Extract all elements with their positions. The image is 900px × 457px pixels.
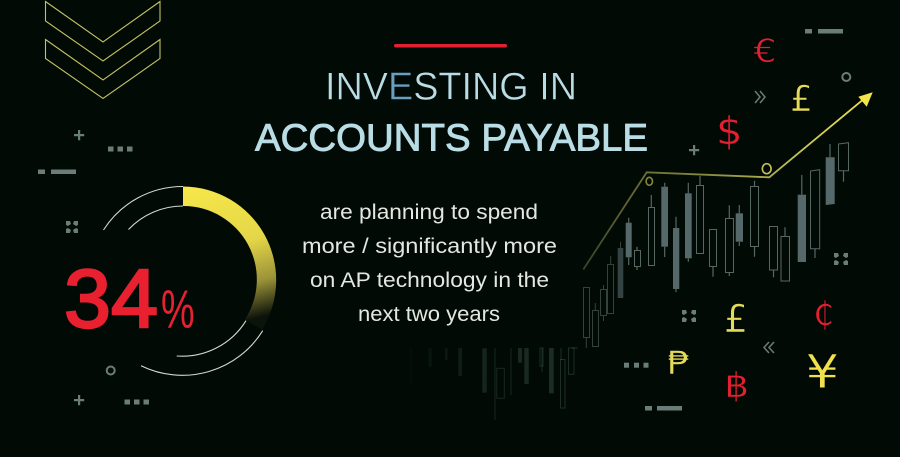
- icon: cedi: ₵: [813, 294, 834, 333]
- body text: on AP technology in the: [310, 268, 549, 292]
- icon: peso: ₱: [667, 345, 691, 382]
- donut chart: 34 percent: [104, 186, 276, 375]
- body text: more / significantly more: [302, 234, 557, 258]
- icon: euro: €: [753, 33, 777, 70]
- title: INVESTING IN: [325, 66, 577, 108]
- trend arrow: [583, 92, 873, 270]
- title: ACCOUNTS PAYABLE: [255, 118, 648, 160]
- accent line: [394, 44, 507, 48]
- icon: double chevrons: [46, 2, 160, 98]
- big number: 34%: 34: [64, 252, 158, 345]
- icon: dollar: $: [716, 110, 743, 154]
- icon: yen: ¥: [805, 345, 839, 399]
- body text: [302, 200, 557, 326]
- candlestick reflection: fading: [409, 348, 578, 420]
- body text: next two years: [358, 302, 500, 326]
- icon: pound upper: £: [790, 79, 813, 120]
- candlestick chart: [584, 143, 848, 348]
- title: [255, 66, 648, 160]
- body text: are planning to spend: [320, 200, 538, 224]
- icon: pound lower: £: [724, 297, 748, 341]
- big number: 34%: %: [161, 279, 195, 339]
- icon: baht: ฿: [724, 365, 749, 405]
- decorative marks: right side: [624, 29, 850, 410]
- decorative marks: left side: [38, 130, 149, 405]
